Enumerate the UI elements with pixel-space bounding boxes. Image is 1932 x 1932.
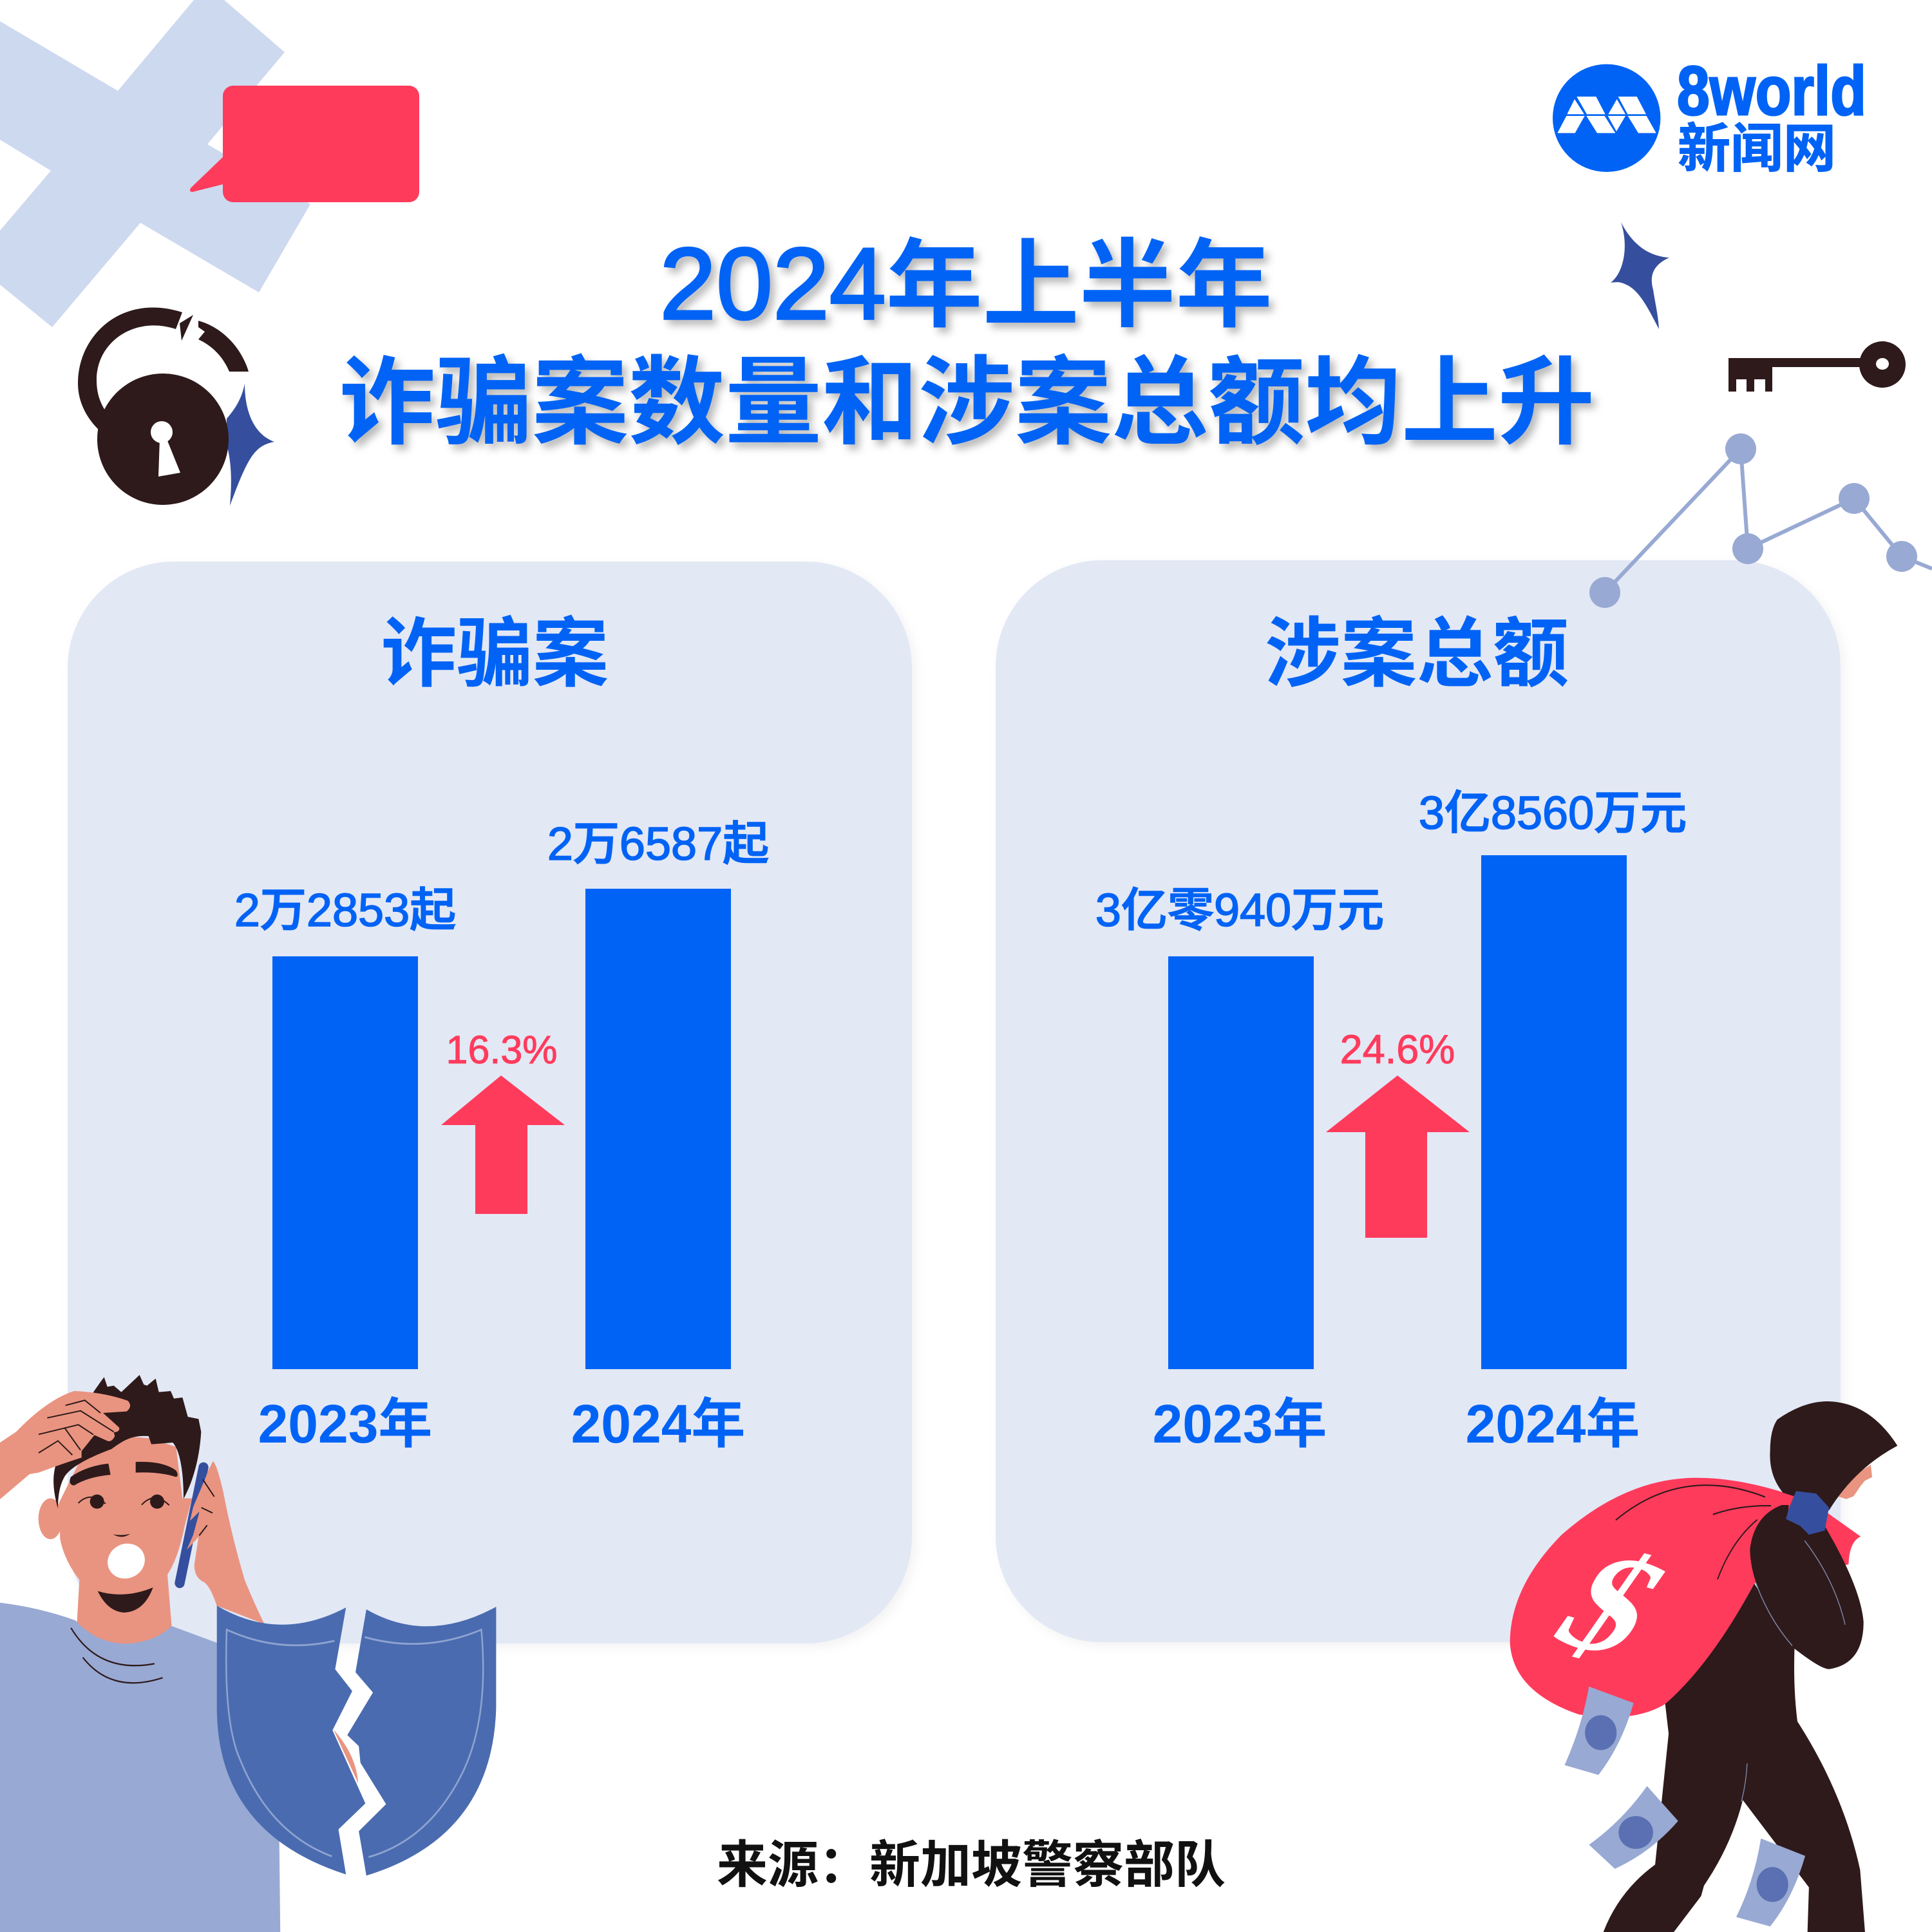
title: 诈骗案数量和涉案总额均上升 bbox=[339, 348, 1595, 457]
arrow: up 16.3% bbox=[441, 1028, 565, 1214]
bar chart: amount involved: 2024年 bbox=[1466, 1394, 1640, 1454]
bar chart: fraud cases: 2万6587起 bbox=[547, 819, 769, 870]
money bag bbox=[1510, 1478, 1861, 1718]
eyes bbox=[90, 1495, 104, 1509]
illustration: worried man with phone and broken shield bbox=[0, 1375, 496, 1932]
icon: four-point star bbox=[1611, 222, 1669, 329]
decorative large cross bbox=[0, 0, 310, 327]
heading: 涉案总额: 涉案总额 bbox=[1265, 612, 1569, 697]
bank note 3 bbox=[1736, 1839, 1805, 1926]
arrow: up 16.3%: 16.3% bbox=[446, 1028, 557, 1072]
logo: 8world bbox=[1553, 52, 1866, 178]
title: 2024年上半年 bbox=[659, 227, 1273, 341]
bar chart: fraud cases: 2024年 bbox=[571, 1394, 745, 1454]
panel: amount involved bbox=[996, 560, 1841, 1642]
hood bbox=[1770, 1401, 1897, 1510]
speech bubble bbox=[190, 86, 419, 202]
icon: broken padlock with star bbox=[78, 308, 274, 506]
bar chart: amount involved: 3亿零940万元 bbox=[1095, 885, 1384, 936]
hand on forehead bbox=[0, 1391, 130, 1499]
title bbox=[339, 227, 1595, 457]
nose bbox=[113, 1534, 130, 1537]
illustration: thief with money bag bbox=[1510, 1401, 1897, 1932]
icon: dollar sign: $ bbox=[1526, 1523, 1698, 1685]
face details, hair, hands and phone bbox=[0, 1375, 265, 1624]
bank note 2 bbox=[1589, 1786, 1678, 1869]
bar chart: amount involved bbox=[1095, 788, 1687, 1454]
hair bbox=[53, 1375, 201, 1509]
finger lines bbox=[39, 1400, 114, 1455]
network graph bbox=[1589, 433, 1932, 608]
logo: 8world: 新闻网 bbox=[1678, 120, 1836, 178]
body and legs bbox=[1604, 1584, 1865, 1932]
bank note 1 bbox=[1564, 1687, 1634, 1775]
arm bbox=[1750, 1505, 1864, 1669]
bag crease lines bbox=[1616, 1485, 1771, 1579]
open mouth bbox=[102, 1537, 151, 1585]
arrow: up 24.6% bbox=[1326, 1027, 1470, 1238]
sleeve cuff bbox=[1786, 1491, 1829, 1535]
icon: key bbox=[1728, 341, 1906, 392]
phone bbox=[180, 1467, 204, 1583]
bar chart: fraud cases: 2023年 bbox=[258, 1394, 432, 1454]
head: ear, face and neck bbox=[39, 1436, 192, 1653]
shirt bbox=[0, 1603, 280, 1932]
heading: 诈骗案: 诈骗案 bbox=[381, 612, 609, 697]
hand holding phone bbox=[187, 1461, 265, 1624]
bar chart: amount involved: 2023年 bbox=[1153, 1394, 1327, 1454]
broken shield bbox=[217, 1605, 496, 1875]
face bbox=[1838, 1465, 1872, 1499]
panel: fraud cases bbox=[68, 562, 912, 1643]
logo: 8world: 8world bbox=[1677, 52, 1866, 129]
arrow: up 24.6%: 24.6% bbox=[1340, 1027, 1455, 1072]
source line: 来源：新加坡警察部队 bbox=[717, 1836, 1226, 1893]
bar chart: fraud cases bbox=[234, 819, 769, 1454]
clothing lines bbox=[1741, 1540, 1845, 1802]
eyebrows bbox=[70, 1464, 111, 1486]
bar chart: amount involved: 3亿8560万元 bbox=[1419, 788, 1687, 839]
bar chart: fraud cases: 2万2853起 bbox=[234, 885, 456, 936]
